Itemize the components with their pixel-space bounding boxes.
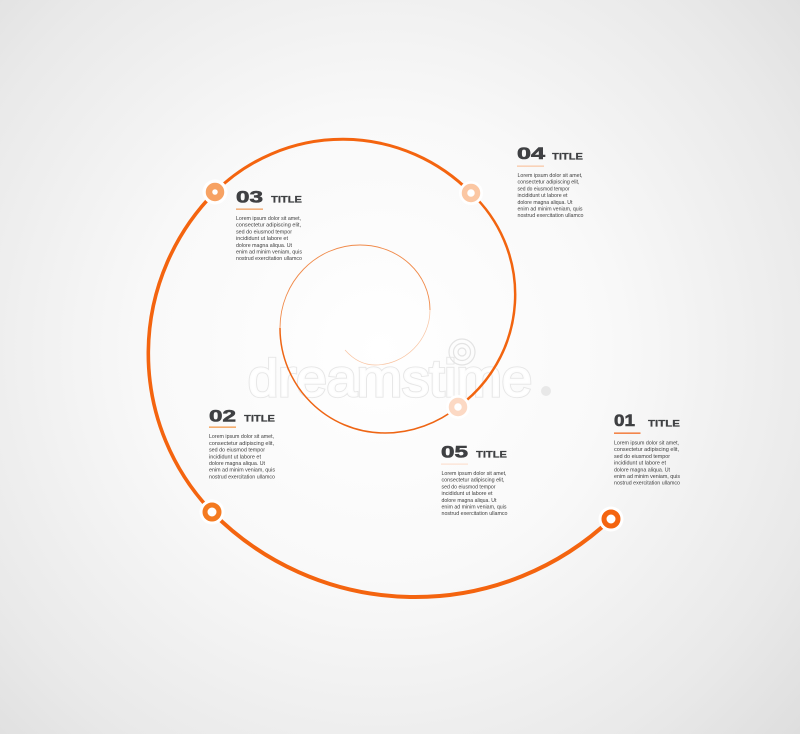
- text block 02: incididunt ut labore et: [209, 454, 262, 460]
- text block 01: nostrud exercitation ullamco: [614, 481, 680, 487]
- watermark: dreamstime: [248, 350, 532, 408]
- text block 04: sed do eiusmod tempor: [518, 186, 570, 192]
- number 03: 03: [236, 188, 263, 206]
- text block 01: incididunt ut labore et: [614, 461, 667, 467]
- text block 02: nostrud exercitation ullamco: [209, 474, 275, 480]
- text block 05: enim ad minim veniam, quis: [442, 504, 507, 510]
- panel: step 05: [441, 442, 508, 517]
- number 01: 01: [614, 411, 635, 430]
- text block 05: nostrud exercitation ullamco: [442, 511, 508, 517]
- heading 03: TITLE: [271, 194, 302, 206]
- heading 05: TITLE: [476, 450, 507, 460]
- text block 04: consectetur adipiscing elit,: [518, 180, 580, 186]
- text block 05: consectetur adipiscing elit,: [442, 478, 505, 484]
- node 05: [446, 395, 470, 419]
- text block 04: [518, 173, 584, 219]
- text block 02: [209, 434, 275, 480]
- text block 03: enim ad minim veniam, quis: [236, 250, 302, 256]
- text block 02: sed do eiusmod tempor: [209, 448, 265, 454]
- text block 04: incididunt ut labore et: [518, 193, 568, 199]
- text block 02: Lorem ipsum dolor sit amet,: [209, 434, 274, 440]
- number 05: 05: [441, 442, 468, 462]
- number 04: 04: [517, 144, 546, 163]
- node 04: [459, 181, 483, 205]
- text block 01: sed do eiusmod tempor: [614, 454, 670, 460]
- heading 01: TITLE: [648, 418, 680, 430]
- text block 01: [614, 440, 680, 487]
- text block 02: consectetur adipiscing elit,: [209, 441, 275, 447]
- text block 03: dolore magna aliqua. Ut: [236, 243, 292, 249]
- text block 01: enim ad minim veniam, quis: [614, 474, 680, 480]
- text block 01: dolore magna aliqua. Ut: [614, 467, 670, 473]
- text block 05: dolore magna aliqua. Ut: [442, 498, 497, 504]
- panel: step 04: [517, 144, 584, 219]
- text block 03: nostrud exercitation ullamco: [236, 256, 302, 262]
- panel: step 01: [614, 411, 680, 487]
- text block 01: consectetur adipiscing elit,: [614, 447, 680, 453]
- text block 04: enim ad minim veniam, quis: [518, 206, 583, 212]
- heading 02: TITLE: [244, 414, 275, 424]
- node 03: [202, 180, 228, 204]
- text block 05: [442, 471, 508, 517]
- panel: step 03: [236, 188, 302, 262]
- text block 04: dolore magna aliqua. Ut: [518, 200, 573, 206]
- node 02: [200, 500, 224, 524]
- text block 03: sed do eiusmod tempor: [236, 229, 292, 235]
- text block 04: nostrud exercitation ullamco: [518, 213, 584, 219]
- text block 01: Lorem ipsum dolor sit amet,: [614, 440, 679, 446]
- text block 05: incididunt ut labore et: [442, 491, 493, 497]
- text block 03: incididunt ut labore et: [236, 236, 289, 242]
- text block 02: enim ad minim veniam, quis: [209, 468, 275, 474]
- node 01: [598, 506, 624, 532]
- panel: step 02: [209, 406, 275, 480]
- text block 05: sed do eiusmod tempor: [442, 484, 496, 490]
- text block 04: Lorem ipsum dolor sit amet,: [518, 173, 583, 179]
- number 02: 02: [209, 406, 236, 426]
- text block 03: [236, 216, 302, 262]
- spiral line: [148, 139, 611, 597]
- text block 02: dolore magna aliqua. Ut: [209, 461, 265, 467]
- heading 04: TITLE: [552, 152, 583, 162]
- text block 05: Lorem ipsum dolor sit amet,: [442, 471, 507, 477]
- watermark: dreamstime: [248, 350, 532, 408]
- text block 03: Lorem ipsum dolor sit amet,: [236, 216, 301, 222]
- text block 03: consectetur adipiscing elit,: [236, 223, 302, 229]
